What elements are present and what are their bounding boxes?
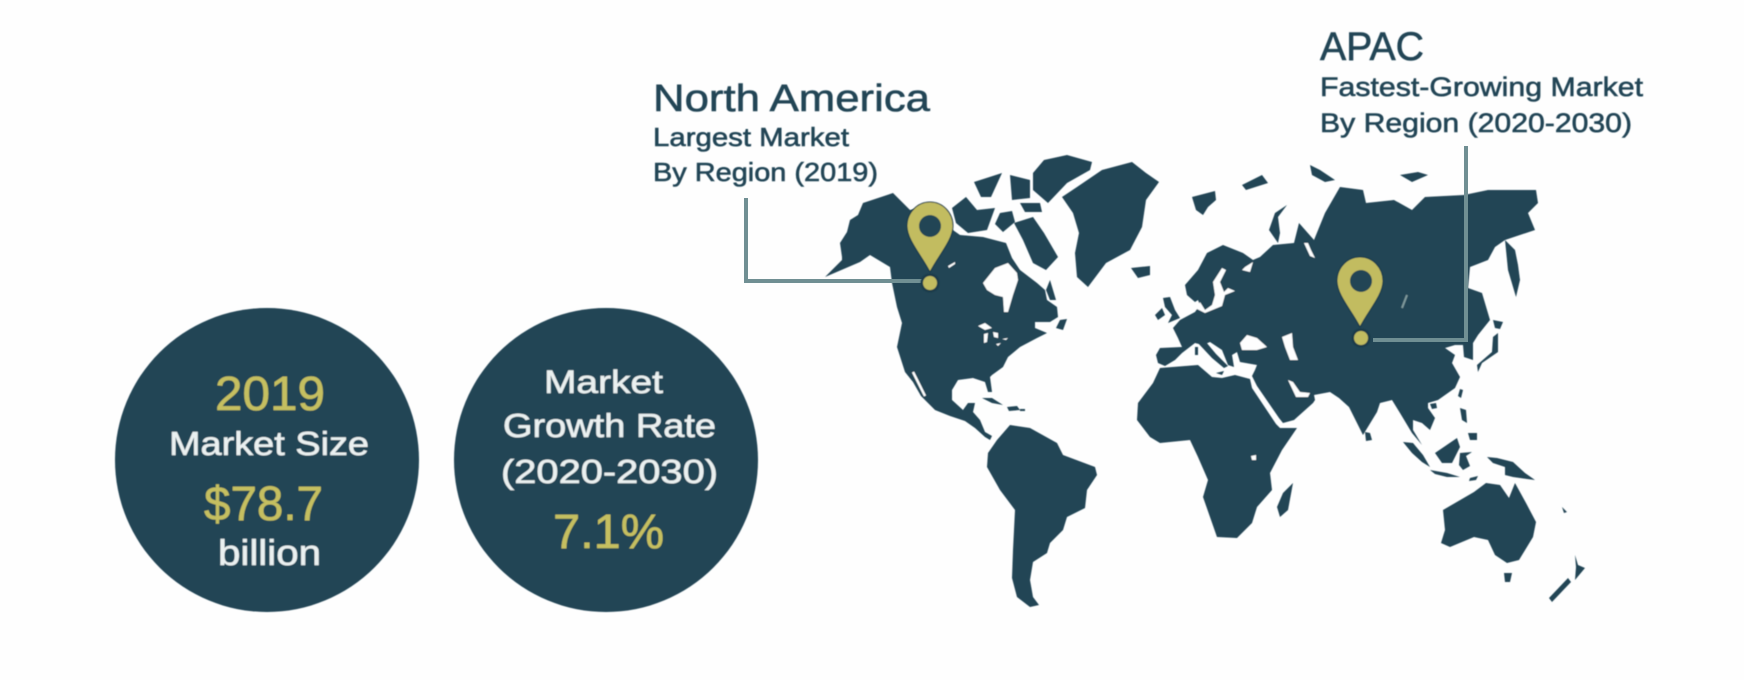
- panel: market growth rate: (2020-2030): [501, 453, 718, 490]
- callout: North America: North America: [653, 78, 931, 120]
- landmass: Britain and Ireland: [1155, 297, 1180, 323]
- landmass: Greenland: [1062, 162, 1159, 287]
- callout: North America: [653, 78, 931, 187]
- callout: North America: Largest Market: [653, 122, 850, 152]
- panel: 2019 market size: billion: [218, 532, 321, 573]
- panel: 2019 market size: [115, 308, 419, 612]
- pin: North America: [907, 202, 953, 292]
- landmass: Japan: [1477, 320, 1503, 372]
- panel: market growth rate: Growth Rate: [503, 407, 716, 444]
- callout: APAC: APAC: [1320, 25, 1424, 69]
- panel: market growth rate: 7.1%: [553, 506, 664, 559]
- landmass: Tasmania and New Zealand: [1504, 507, 1585, 602]
- landmass: Iceland, Svalbard and northern islands: [1131, 165, 1428, 278]
- callout: APAC: Fastest-Growing Market: [1320, 72, 1644, 102]
- landmass: Africa: [1137, 365, 1297, 538]
- callout: North America: By Region (2019): [653, 157, 878, 187]
- landmass: New Guinea: [1487, 457, 1535, 480]
- landmass: Eurasia: [1156, 187, 1538, 445]
- leader line: North America: [746, 198, 923, 281]
- landmass: Italy and Mediterranean islands: [1195, 342, 1228, 375]
- landmass: Kamchatka: [1505, 240, 1520, 297]
- callout: APAC: By Region (2020-2030): [1320, 108, 1632, 138]
- landmass: Southeast Asia islands: [1365, 389, 1478, 481]
- panel: market growth rate: Market: [544, 364, 663, 400]
- landmass: South America: [987, 425, 1097, 607]
- panel: 2019 market size: $78.7: [204, 478, 323, 531]
- landmass: North and Central America: [825, 193, 1058, 440]
- panel: market growth rate: [454, 308, 758, 612]
- landmass: Australia: [1441, 483, 1536, 563]
- water: Lake Baikal: [1402, 295, 1407, 308]
- leader line: APAC: [1373, 146, 1466, 340]
- pin: APAC: [1337, 257, 1383, 348]
- world map: [825, 155, 1585, 607]
- landmass: Arctic islands: [952, 155, 1092, 330]
- callout: APAC: [1320, 25, 1644, 138]
- water: Baja California gulf: [913, 372, 925, 396]
- landmass: Caribbean islands: [982, 398, 1025, 411]
- water: inland seas and lakes: [948, 243, 1315, 460]
- landmass: Madagascar: [1277, 483, 1293, 517]
- panel: 2019 market size: Market Size: [169, 425, 369, 462]
- panel: 2019 market size: 2019: [215, 368, 325, 421]
